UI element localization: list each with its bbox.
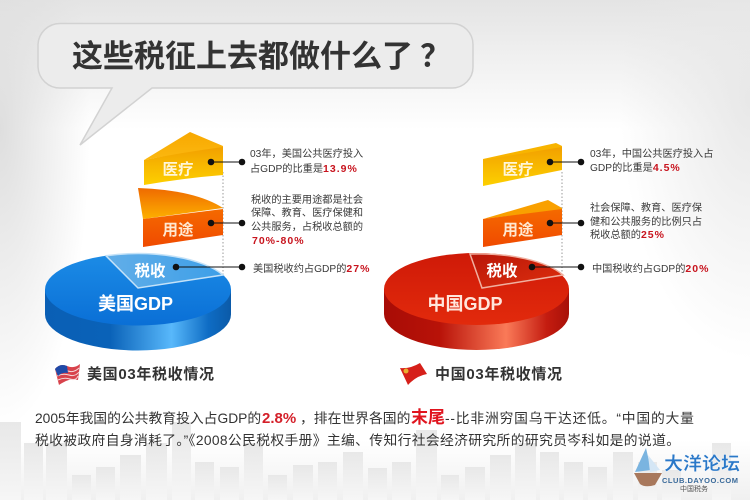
watermark logo	[634, 448, 740, 493]
connector lines US	[173, 159, 245, 270]
wedge: China healthcare: 医疗	[502, 160, 534, 178]
3D pie: US GDP	[45, 254, 231, 351]
callout: US healthcare: 占GDP的比重是13.9%	[250, 163, 358, 175]
body paragraph: 2005年我国的公共教育投入占GDP的	[35, 411, 261, 426]
3D pie: China GDP	[384, 253, 569, 350]
watermark logo: 大洋论坛	[664, 454, 740, 474]
3D pie: China GDP: 中国GDP	[427, 294, 503, 314]
wedge: China healthcare	[483, 143, 562, 186]
icon: sailing ship	[634, 448, 662, 486]
callout: China tax share: 中国税收约占GDP的20%	[592, 262, 709, 275]
wedge: China uses	[483, 200, 562, 247]
wedge: China uses: 用途	[502, 220, 534, 239]
connector lines China	[529, 159, 584, 270]
watermark logo: CLUB.DAYOO.COM	[662, 476, 738, 485]
callout: China healthcare: GDP的比重是4.5%	[590, 162, 681, 174]
watermark logo: 中国税务	[680, 484, 708, 493]
wedge: US uses	[138, 188, 223, 247]
title text: ？	[420, 39, 451, 74]
3D pie: US GDP: 税收	[134, 262, 166, 280]
panel: US tax situation	[45, 132, 370, 385]
body paragraph	[35, 408, 695, 448]
body paragraph: 末尾	[411, 408, 445, 427]
dotted guide China	[561, 172, 563, 275]
3D pie: China GDP: 税收	[486, 262, 518, 280]
callout: China uses: 社会保障、教育、医疗保	[590, 201, 702, 214]
body paragraph: ，排在世界各国的	[300, 411, 410, 426]
body paragraph: 税收被政府自身消耗了。”《2008公民税权手册》主编、传知行社会经济研究所的研究员岑科如是的说道。	[35, 432, 680, 448]
callout: US uses: 70%-80%	[252, 235, 305, 247]
icon: US flag	[55, 364, 80, 385]
callout: US healthcare: 03年，美国公共医疗投入	[250, 147, 363, 160]
wedge: US healthcare	[144, 132, 223, 185]
callout: US uses: 保障、教育、医疗保健和	[251, 206, 363, 219]
callout: China uses: 健和公共服务的比例只占	[590, 215, 702, 228]
callout: US tax share: 美国税收约占GDP的27%	[253, 262, 370, 275]
callout: US uses: 公共服务，占税收总额的	[251, 220, 363, 233]
3D pie: US GDP: 美国GDP	[98, 293, 173, 314]
caption US: 美国03年税收情况	[87, 365, 214, 383]
panel: China tax situation	[384, 143, 713, 385]
body paragraph: 2.8%	[262, 410, 296, 427]
caption China: 中国03年税收情况	[435, 365, 562, 383]
body paragraph: --比非洲穷国乌干达还低。“中国的大量	[445, 411, 695, 426]
icon: China flag	[400, 363, 427, 385]
speech bubble title	[38, 23, 473, 145]
wedge: US uses: 用途	[162, 220, 194, 239]
callout: China healthcare: 03年，中国公共医疗投入占	[590, 147, 713, 160]
callout: US uses: 税收的主要用途都是社会	[251, 193, 363, 206]
callout: China uses: 税收总额的25%	[590, 229, 665, 241]
dotted guide US	[222, 172, 224, 275]
title text: 这些税征上去都做什么了	[72, 39, 413, 74]
wedge: US healthcare: 医疗	[162, 160, 194, 178]
